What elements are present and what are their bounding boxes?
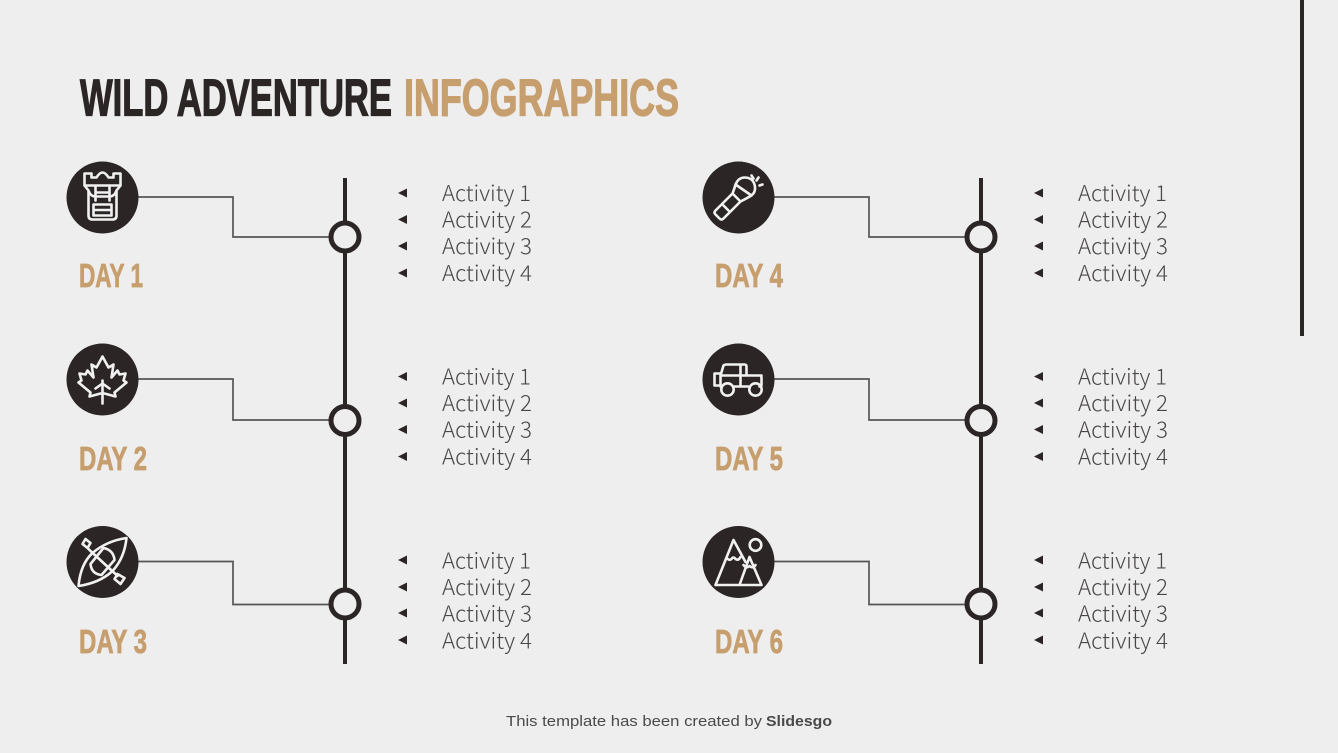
label: day 4: DAY 4: [715, 258, 783, 295]
panel: day 3: [66, 526, 532, 661]
icon: backpack: [66, 162, 138, 234]
label: day 3: DAY 3: [79, 624, 147, 661]
activity list: day 1: [398, 176, 532, 288]
activity list: day 5: [1034, 360, 1168, 472]
activity list: day 5: Activity 3: [1078, 412, 1168, 444]
icon: maple leaf: [66, 344, 138, 416]
activity list: day 4: Activity 2: [1078, 202, 1168, 234]
connector: day 4: [774, 197, 966, 237]
activity list: day 5: Activity 4: [1078, 440, 1168, 472]
activity list: day 3: Activity 1: [442, 544, 531, 576]
label: day 6: DAY 6: [715, 624, 783, 661]
timeline: left: [343, 178, 347, 664]
activity list: day 3: Activity 3: [442, 596, 532, 628]
activity list: day 3: Activity 4: [442, 624, 532, 656]
node: day 1: [331, 223, 359, 251]
label: day 5: DAY 5: [715, 441, 783, 478]
footer credit: [506, 714, 832, 730]
activity list: day 6: [1034, 544, 1168, 656]
activity list: day 2: Activity 4: [442, 440, 532, 472]
activity list: day 6: Activity 1: [1078, 544, 1167, 576]
label: day 2: DAY 2: [79, 441, 147, 478]
label: day 1: DAY 1: [79, 258, 143, 295]
panel: day 4: [702, 162, 1168, 295]
icon: kayak: [66, 526, 138, 598]
activity list: day 1: Activity 3: [442, 229, 532, 261]
node: day 5: [967, 406, 995, 434]
activity list: day 6: Activity 2: [1078, 570, 1168, 602]
icon: car: [702, 344, 774, 416]
activity list: day 3: Activity 2: [442, 570, 532, 602]
panel: day 2: [66, 344, 532, 478]
node: day 3: [331, 590, 359, 618]
activity list: day 4: Activity 1: [1078, 176, 1167, 208]
activity list: day 4: [1034, 176, 1168, 288]
connector: day 6: [774, 562, 966, 604]
panel: day 6: [702, 526, 1168, 661]
activity list: day 6: Activity 3: [1078, 596, 1168, 628]
icon: mountains: [702, 526, 774, 598]
activity list: day 2: [398, 360, 532, 472]
node: day 4: [967, 223, 995, 251]
footer credit: Slidesgo: [766, 714, 832, 730]
activity list: day 1: Activity 4: [442, 256, 532, 288]
connector: day 3: [138, 562, 330, 604]
panel: day 5: [702, 344, 1168, 478]
activity list: day 2: Activity 3: [442, 412, 532, 444]
activity list: day 1: Activity 2: [442, 202, 532, 234]
activity list: day 4: Activity 4: [1078, 256, 1168, 288]
connector: day 5: [774, 379, 966, 420]
activity list: day 5: Activity 1: [1078, 360, 1167, 392]
title: INFOGRAPHICS: [404, 68, 679, 126]
icon: flashlight: [702, 162, 774, 234]
activity list: day 4: Activity 3: [1078, 229, 1168, 261]
node: day 2: [331, 406, 359, 434]
activity list: day 3: [398, 544, 532, 656]
node: day 6: [967, 590, 995, 618]
footer credit: This template has been created by: [506, 714, 763, 730]
connector: day 1: [138, 197, 330, 237]
activity list: day 1: Activity 1: [442, 176, 531, 208]
title: WILD ADVENTURE: [80, 68, 392, 126]
panel: day 1: [66, 162, 532, 295]
activity list: day 2: Activity 1: [442, 360, 531, 392]
decorative bar top right: [1300, 0, 1304, 336]
activity list: day 5: Activity 2: [1078, 386, 1168, 418]
activity list: day 2: Activity 2: [442, 386, 532, 418]
activity list: day 6: Activity 4: [1078, 624, 1168, 656]
timeline: right: [979, 178, 983, 664]
connector: day 2: [138, 379, 330, 420]
